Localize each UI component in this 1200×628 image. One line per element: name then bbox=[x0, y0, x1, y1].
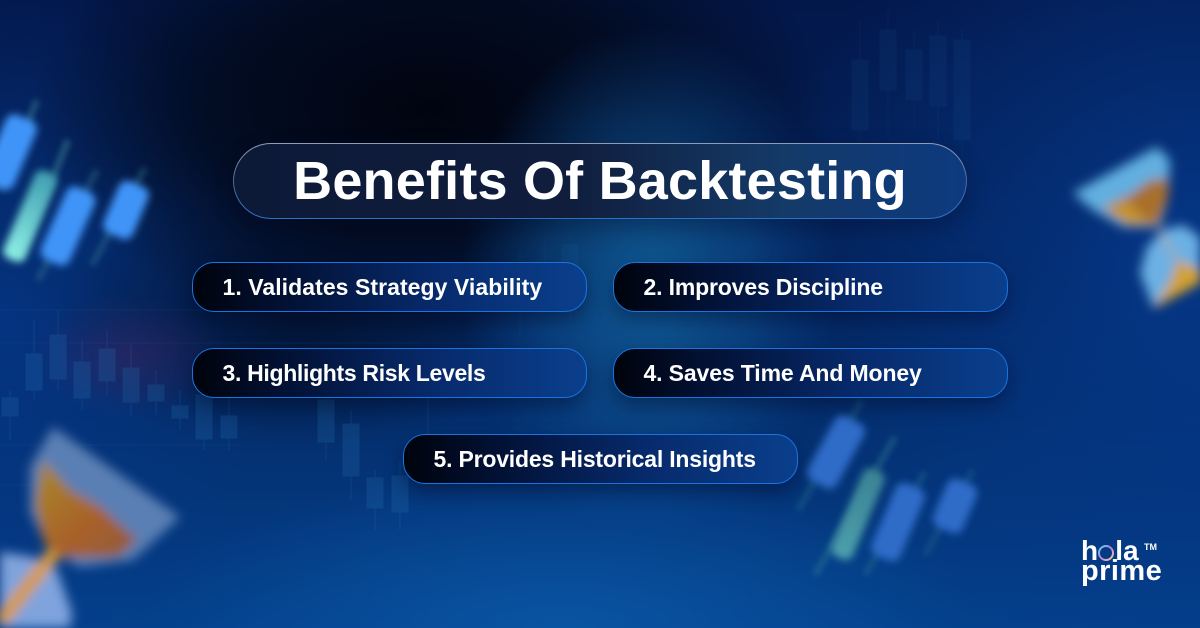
title pill bbox=[233, 143, 967, 219]
logo: hola prime bbox=[1081, 535, 1162, 587]
item 4 pill: 4. Saves Time And Money bbox=[644, 360, 922, 386]
item 2 pill bbox=[613, 262, 1008, 312]
item 1 pill: 1. Validates Strategy Viability bbox=[222, 274, 542, 300]
item 1 pill bbox=[192, 262, 587, 312]
logo word: prime: prime bbox=[1081, 555, 1162, 587]
chart: faint left candlesticks bbox=[0, 310, 428, 530]
item 4 pill bbox=[613, 348, 1008, 398]
item 5 pill: 5. Provides Historical Insights bbox=[434, 446, 756, 472]
item 5 pill bbox=[403, 434, 798, 484]
icon: blurred hourglass top right bbox=[1073, 147, 1200, 307]
icon: blurred candlesticks bottom right bbox=[798, 400, 980, 575]
logo trademark: TM bbox=[1144, 542, 1157, 552]
logo ring bbox=[1098, 545, 1114, 561]
icon: blurred candlesticks top left bbox=[0, 100, 152, 280]
item 3 pill: 3. Highlights Risk Levels bbox=[222, 360, 485, 386]
heading: Benefits Of Backtesting bbox=[293, 151, 907, 211]
logo word: hola: hola bbox=[1081, 535, 1139, 566]
chart: faint upper right candlesticks bbox=[512, 10, 970, 340]
item 2 pill: 2. Improves Discipline bbox=[644, 274, 883, 300]
item 3 pill bbox=[192, 348, 587, 398]
icon: blurred hourglass bottom left bbox=[0, 427, 180, 628]
